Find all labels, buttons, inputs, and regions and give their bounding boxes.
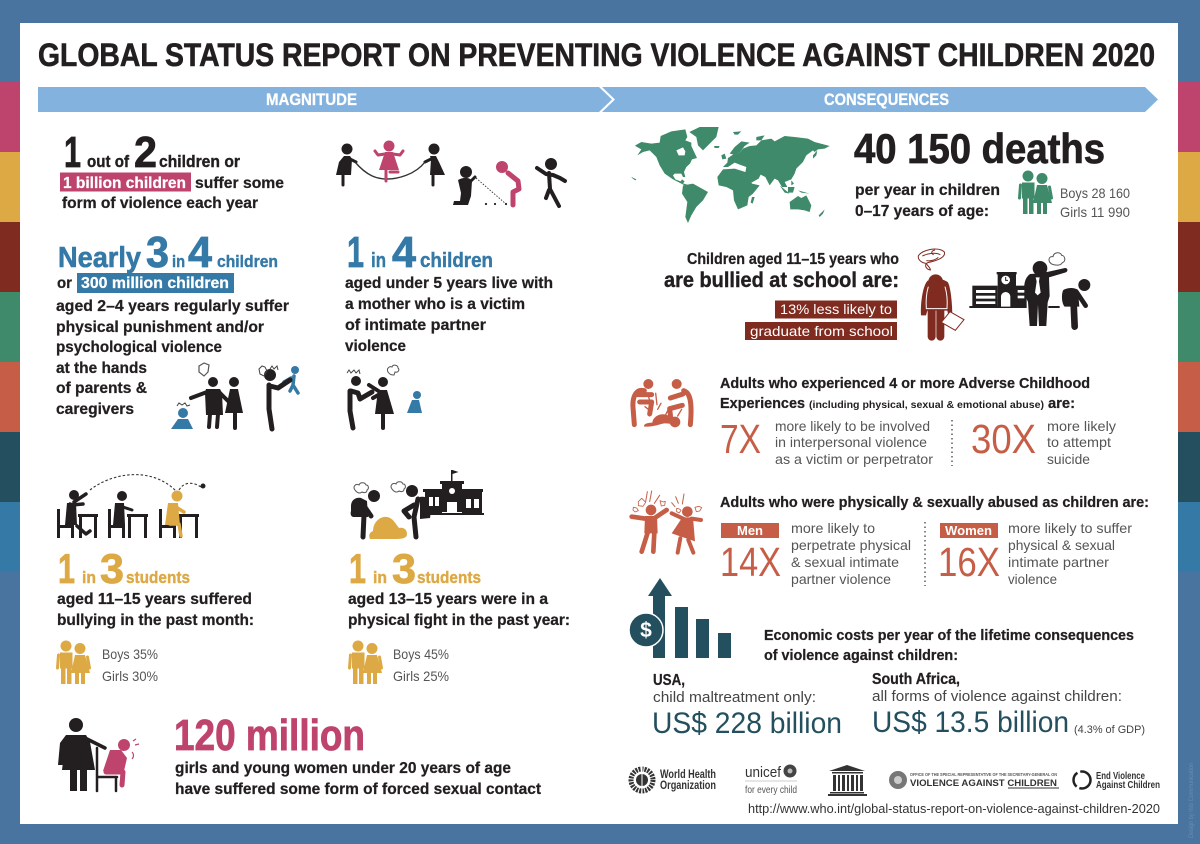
big stat: 1 in 3 students [58, 545, 190, 592]
big stat: nearly 3 in 4: Nearly [58, 242, 141, 274]
panel: physically and sexually abused [720, 495, 1149, 587]
big stat: 1 in 4: children [420, 250, 493, 272]
panel: 1 in 3 students bullying [57, 545, 254, 684]
heading: adverse childhood experiences: are: [1048, 396, 1075, 412]
text: forced sexual contact [175, 760, 541, 798]
text: deaths by sex: Boys 28 160 [1060, 185, 1130, 201]
callout: less likely to graduate [745, 300, 897, 340]
text: forced sexual contact: girls and young women under 20 years of age [175, 760, 511, 777]
icon: children skipping rope and playing [336, 140, 565, 206]
text: men description: perpetrate physical [791, 537, 911, 553]
text: fight description [348, 591, 570, 629]
logo: Violence Against Children office [889, 771, 1059, 789]
text: fight percentages [393, 646, 449, 684]
big stat: 1 in 3 students [349, 545, 481, 592]
logo: UNICEF: unicef [745, 764, 782, 781]
text: description: violence [345, 338, 406, 355]
panel: 120 million [174, 711, 541, 798]
panel: 1 out of 2 children [60, 128, 284, 212]
text: women description: physical & sexual [1008, 537, 1115, 553]
logo: UNICEF: for every child [745, 784, 797, 796]
banner: consequences: CONSEQUENCES [824, 90, 949, 109]
panel: bullied at school [664, 251, 899, 340]
callout: less likely to graduate: 13% less likely to [780, 301, 892, 317]
text: bullying percentages: Boys 35% [102, 646, 158, 662]
text: children aged 11-15 bullied: Children aged 11–15 years who [687, 251, 899, 268]
text: description: aged 2–4 years regularly suffer [56, 298, 289, 315]
stat: USA cost [652, 672, 842, 740]
text: bullying percentages [102, 646, 158, 684]
big stat: 1 out of 2: 2 [134, 128, 157, 177]
text: per year in children: per year in children [855, 182, 1000, 199]
text: 7X description: as a victim or perpetrator [775, 451, 933, 467]
text: 30X description: more likely [1047, 418, 1116, 434]
stat: USA cost: USA, [653, 672, 685, 689]
stat: USA cost: US$ 228 billion [652, 707, 842, 740]
logo: World Health Organization: World Health [660, 769, 716, 781]
text: description: aged under 5 years live with [345, 275, 553, 292]
text: description: at the hands [56, 360, 147, 377]
icon: boy and girl [58, 640, 90, 684]
heading: economic costs: of violence against children: [764, 648, 958, 664]
panel: economic costs [652, 628, 1145, 740]
banner: consequences [602, 87, 1158, 112]
big stat: 1 in 3 students: 3 [100, 545, 124, 592]
stat: South Africa cost: all forms of violence against children: [872, 688, 1122, 705]
text: children aged 11-15 bullied: are bullied at school are: [664, 269, 899, 292]
logo: End Violence Against Children [1074, 771, 1160, 791]
highlight: 300 million children [57, 273, 234, 293]
icon: woman comforting crying girl [58, 718, 139, 791]
text: 7X description [775, 418, 933, 467]
heading: abused as children: Adults who were physically & sexually abused as children are: [720, 495, 1149, 511]
big stat: 1 out of 2 [64, 128, 240, 177]
big stat: nearly 3 in 4 [58, 228, 278, 277]
highlight: 300 million children: or [57, 275, 72, 292]
heading: adverse childhood experiences [720, 376, 1090, 412]
text: fight percentages: Girls 25% [393, 668, 449, 684]
logo: World Health Organization [631, 766, 716, 794]
heading: adverse childhood experiences: Adults who experienced 4 or more Adverse Childhood [720, 376, 1090, 392]
highlight: 1 billion children: 1 billion children [63, 175, 186, 192]
text: description: physical punishment and/or [56, 319, 264, 336]
text: women description: more likely to suffer [1008, 520, 1132, 536]
label: men [721, 523, 779, 538]
big stat: nearly 3 in 4: 4 [188, 228, 213, 277]
banner: magnitude [38, 87, 612, 112]
text: fight description: aged 13–15 years were in a [348, 591, 548, 608]
text: bullying description [57, 591, 254, 629]
label: women: Women [945, 523, 992, 538]
panel: 40 150 deaths [854, 125, 1130, 220]
panel: 1 in 4 children [345, 228, 553, 355]
text: description: caregivers [56, 401, 134, 418]
big stat: nearly 3 in 4: children [217, 252, 278, 271]
text: suffer some form of violence: suffer some [195, 175, 284, 192]
text: bullying description: bullying in the past month: [57, 612, 254, 629]
text: deaths by sex: Girls 11 990 [1060, 204, 1130, 220]
icon: boy and girl [1020, 170, 1052, 214]
heading: economic costs [764, 628, 1134, 664]
big stat: 1 in 4 [347, 228, 493, 277]
logo: Violence Against Children office: OFFICE OF THE SPECIAL REPRESENTATIVE OF THE SECRETARY-GENERAL ON [910, 772, 1057, 777]
text: 30X description: to attempt [1047, 434, 1111, 450]
text: children aged 11-15 bullied [664, 251, 899, 292]
stat: South Africa cost: (4.3% of GDP) [1074, 724, 1145, 736]
banner: magnitude: MAGNITUDE [266, 90, 357, 109]
text: description [56, 298, 289, 418]
icon: distressed student and school [918, 249, 1090, 337]
text: deaths by sex [1060, 185, 1130, 220]
stat: 7X: 7X [720, 416, 761, 462]
big stat: 1 in 3 students: 1 [58, 545, 75, 592]
heading: economic costs: Economic costs per year of the lifetime consequences [764, 628, 1134, 644]
big stat: 1 in 4: 4 [392, 228, 417, 277]
icon: intimate partner violence scene [347, 365, 422, 428]
text: fight description: physical fight in the past year: [348, 612, 570, 629]
text: 7X description: in interpersonal violence [775, 434, 927, 450]
stat: 16X: 16X [938, 539, 1000, 585]
big stat: 1 in 3 students: 1 [349, 545, 366, 592]
text: description: psychological violence [56, 339, 222, 356]
big stat: nearly 3 in 4: in [172, 252, 185, 271]
big stat: 40 150 deaths: 40 150 deaths [854, 125, 1105, 172]
panel: adverse childhood experiences [720, 376, 1116, 467]
big stat: 1 in 3 students: students [126, 568, 190, 587]
link: report URL: http://www.who.int/global-status-report-on-violence-against-children-2020 [748, 802, 1160, 816]
text: men description [791, 520, 911, 587]
big stat: 1 in 3 students: 3 [392, 545, 416, 592]
big stat: 1 in 3 students: students [417, 568, 481, 587]
callout: less likely to graduate: graduate from school [750, 323, 893, 339]
text: women description: intimate partner [1008, 554, 1109, 570]
big stat: 1 in 3 students: in [373, 568, 387, 587]
icon: world map [631, 127, 830, 223]
logo: Violence Against Children office: VIOLENCE AGAINST CHILDREN [910, 778, 1057, 789]
heading: adverse childhood experiences: (including physical, sexual & emotional abuse) [809, 399, 1044, 411]
text: women description: violence [1008, 571, 1057, 587]
text: description: of parents & [56, 380, 147, 397]
icon: parents shouting at children [171, 363, 299, 429]
credit: designer: Design by Inís Communication [1188, 763, 1195, 838]
text: bullying description: aged 11–15 years suffered [57, 591, 252, 608]
text: suffer some form of violence: form of violence each year [62, 195, 258, 212]
highlight: 300 million children: 300 million children [81, 275, 229, 292]
big stat: 1 out of 2: children or [159, 152, 240, 171]
text: men description: more likely to [791, 520, 875, 536]
stat: 14X: 14X [720, 539, 781, 585]
big stat: 1 out of 2: out of [87, 152, 129, 171]
stat: South Africa cost: US$ 13.5 billion [872, 706, 1069, 739]
logo: UNICEF [745, 764, 797, 796]
text: 30X description: suicide [1047, 451, 1090, 467]
big stat: nearly 3 in 4: 3 [146, 228, 169, 277]
big stat: 120 million: 120 million [174, 711, 365, 760]
text: fight percentages: Boys 45% [393, 646, 449, 662]
logo: End Violence Against Children: Against Children [1096, 780, 1160, 791]
stat: South Africa cost: South Africa, [872, 671, 960, 688]
text: description: of intimate partner [345, 317, 486, 334]
icon: dollar coin with bars and arrow: $ [640, 619, 652, 642]
logo: UNESCO [828, 765, 867, 796]
stat: 30X: 30X [971, 416, 1036, 462]
stat: USA cost: child maltreatment only: [653, 689, 816, 706]
icon: violent adults and victim [633, 379, 691, 427]
logo: End Violence Against Children: End Violence [1096, 771, 1145, 782]
icon: classroom bullying [57, 475, 206, 538]
text: bullying percentages: Girls 30% [102, 668, 158, 684]
stat: South Africa cost [872, 671, 1145, 739]
text: per year in children [855, 182, 1000, 220]
text: men description: partner violence [791, 571, 891, 587]
text: 7X description: more likely to be involved [775, 418, 930, 434]
big stat: 1 in 4: 1 [347, 228, 364, 277]
icon: dollar coin with bars and arrow [629, 578, 731, 658]
text: per year in children: 0–17 years of age: [855, 203, 989, 220]
text: description: a mother who is a victim [345, 296, 525, 313]
icon: students fighting outside school [351, 470, 484, 539]
big stat: 1 out of 2: 1 [64, 128, 81, 177]
text: description [345, 275, 553, 355]
label: men: Men [737, 523, 763, 538]
text: 30X description [1047, 418, 1116, 467]
text: suffer some form of violence [62, 175, 284, 212]
panel: nearly 3 in 4 children [56, 228, 289, 418]
panel: 1 in 3 students physical fight [348, 545, 570, 684]
text: men description: & sexual intimate [791, 554, 899, 570]
text: women description [1008, 520, 1132, 587]
icon: arguing adults [632, 491, 702, 553]
heading: adverse childhood experiences: Experiences [720, 396, 805, 412]
icon: boy and girl [350, 640, 382, 684]
logo: World Health Organization: Organization [660, 780, 716, 792]
big stat: 1 in 4: in [371, 250, 386, 272]
text: forced sexual contact: have suffered some form of forced sexual contact [175, 781, 541, 798]
big stat: 1 in 3 students: in [82, 568, 96, 587]
